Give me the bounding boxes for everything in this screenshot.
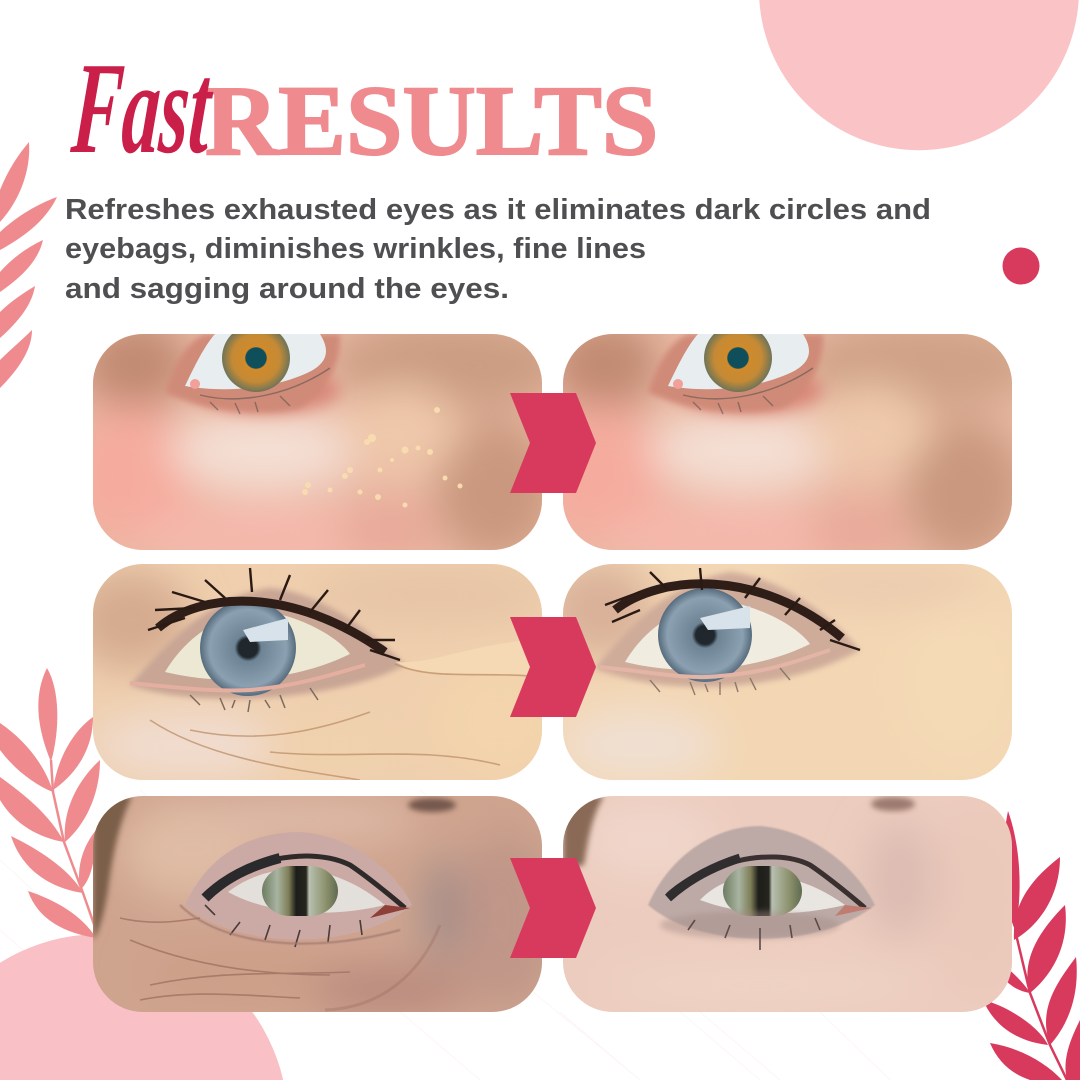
photo: row 1 after	[563, 334, 1012, 550]
wrinkles	[120, 918, 440, 1010]
description text: Refreshes exhausted eyes as it eliminates dark circles and	[65, 194, 931, 226]
arrow: row 2	[510, 617, 596, 717]
description text: and sagging around the eyes.	[65, 273, 509, 305]
eye	[130, 568, 405, 712]
decorative dot	[1002, 248, 1040, 284]
photo: row 3 before	[93, 796, 555, 1015]
hair	[563, 796, 604, 870]
arrow: row 1	[510, 393, 596, 493]
photo: row 2 before	[93, 564, 542, 780]
hair	[93, 796, 132, 940]
eye	[648, 324, 823, 414]
title	[67, 37, 658, 181]
eye	[165, 324, 340, 414]
leaf branch: top left	[0, 142, 57, 388]
eyebrow	[871, 797, 915, 811]
photo: row 1 before	[93, 334, 542, 550]
description text	[65, 194, 931, 305]
decorative circle: top right	[759, 0, 1079, 150]
description text: eyebags, diminishes wrinkles, fine lines	[65, 233, 646, 265]
skin fold	[395, 641, 526, 673]
title word: Fast: Fast	[67, 37, 218, 181]
wrinkles	[150, 664, 530, 780]
leaf branch: bottom right	[983, 811, 1080, 1080]
photo: row 3 after	[563, 796, 1020, 1012]
decorative circle: bottom left	[0, 934, 283, 1080]
photo: row 2 after	[545, 560, 1020, 780]
eye	[180, 832, 412, 947]
skin bumps	[302, 407, 462, 508]
leaf branch: bottom left	[0, 668, 100, 938]
eye	[648, 826, 875, 950]
eye	[595, 568, 860, 695]
title word: RESULTS: RESULTS	[205, 65, 658, 176]
arrow: row 3	[510, 858, 596, 958]
eyebrow	[408, 798, 456, 812]
